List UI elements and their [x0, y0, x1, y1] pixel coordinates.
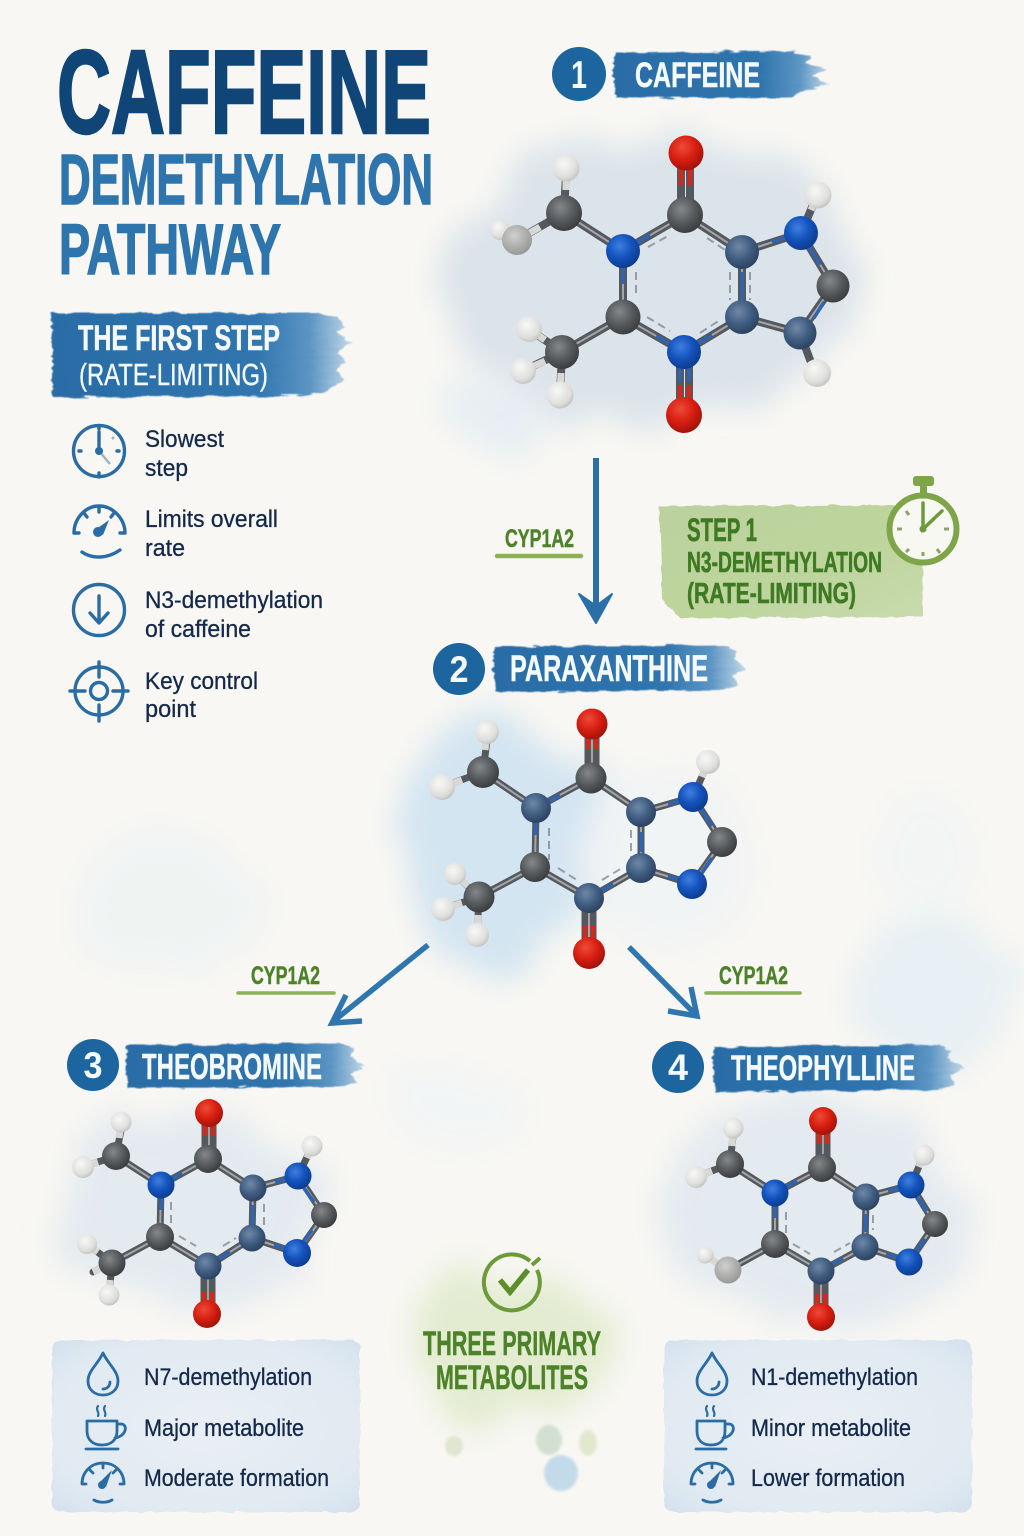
icon: coffee cup [696, 1406, 733, 1449]
step 4 header: theophylline: 4 [668, 1047, 688, 1088]
step 1 header: caffeine [552, 47, 830, 101]
arrow: paraxanthine to theophylline [629, 947, 697, 1016]
banner: the first step heading: THE FIRST STEP [78, 319, 280, 358]
step 4 header: theophylline [652, 1041, 965, 1093]
list item: slowest step: step [145, 455, 188, 482]
step 4 header: theophylline: THEOPHYLLINE [731, 1049, 915, 1088]
list item: key control point: point [145, 696, 196, 723]
panel: theophylline facts [664, 1340, 972, 1512]
step 2 header: paraxanthine: 2 [450, 649, 468, 690]
panel: theobromine facts: N7-demethylation [144, 1364, 312, 1391]
step 2 header: paraxanthine: PARAXANTHINE [510, 648, 708, 689]
molecule: paraxanthine [429, 708, 737, 969]
icon: water drop [697, 1353, 727, 1395]
step 1 header: caffeine: CAFFEINE [635, 56, 760, 95]
callout: step 1 n3-demethylation: N3-DEMETHYLATION [687, 547, 882, 579]
panel: the first step [51, 313, 352, 723]
list item: slowest step: Slowest [145, 426, 224, 453]
arrow: caffeine to paraxanthine [579, 458, 612, 623]
title [57, 26, 433, 290]
list item: n3-demethylation of caffeine [74, 584, 323, 643]
panel: theobromine facts: Moderate formation [144, 1465, 329, 1492]
panel: theophylline facts: Minor metabolite [751, 1415, 911, 1442]
step 1 header: caffeine: 1 [571, 54, 587, 97]
watercolor splashes [445, 1425, 597, 1491]
enzyme label: cyp1a2 to theophylline [706, 962, 800, 993]
list item: key control point: Key control [145, 668, 258, 695]
title: PATHWAY [59, 211, 281, 290]
icon: check circle [484, 1254, 540, 1310]
watercolor background washes [55, 135, 1010, 1420]
enzyme label: cyp1a2 step 1 [497, 525, 581, 556]
emblem: three primary metabolites: THREE PRIMARY [423, 1325, 601, 1363]
molecule: caffeine [490, 136, 850, 433]
icon: stopwatch [890, 476, 956, 562]
panel: theobromine facts: Major metabolite [144, 1415, 304, 1442]
title: CAFFEINE [57, 26, 431, 159]
enzyme label: cyp1a2 to theophylline: CYP1A2 [719, 962, 788, 990]
enzyme label: cyp1a2 step 1: CYP1A2 [505, 525, 574, 553]
callout: step 1 n3-demethylation: STEP 1 [687, 512, 757, 548]
list item: slowest step [74, 426, 224, 482]
list item: n3-demethylation of caffeine: of caffeine [145, 616, 251, 643]
step 3 header: theobromine: THEOBROMINE [142, 1046, 322, 1087]
emblem: three primary metabolites: METABOLITES [436, 1359, 588, 1397]
panel: theophylline facts: Lower formation [751, 1465, 905, 1492]
banner: the first step heading: (RATE-LIMITING) [79, 357, 268, 392]
list item: key control point [70, 662, 258, 723]
list item: limits overall rate: Limits overall [145, 506, 278, 533]
callout: step 1 n3-demethylation [659, 476, 956, 618]
emblem: three primary metabolites [423, 1254, 601, 1491]
icon: down arrow in circle [74, 584, 124, 636]
step 3 header: theobromine [67, 1039, 365, 1091]
list item: n3-demethylation of caffeine: N3-demethylation [145, 587, 323, 614]
arrow: paraxanthine to theobromine [332, 945, 428, 1023]
panel: theobromine facts [52, 1340, 360, 1512]
banner: the first step heading [51, 313, 352, 397]
icon: water drop [88, 1353, 118, 1395]
enzyme label: cyp1a2 to theobromine [238, 962, 334, 993]
icon: gauge [74, 506, 125, 557]
icon: clock [74, 426, 124, 477]
title: DEMETHYLATION [59, 141, 433, 220]
icon: gauge [82, 1463, 124, 1502]
molecule: theobromine [72, 1099, 337, 1328]
list item: limits overall rate: rate [145, 535, 185, 562]
enzyme label: cyp1a2 to theobromine: CYP1A2 [251, 962, 320, 990]
icon: target [70, 662, 128, 721]
panel: theophylline facts: N1-demethylation [751, 1364, 918, 1391]
callout: step 1 n3-demethylation: (RATE-LIMITING) [687, 578, 856, 610]
molecule: theophylline [685, 1107, 948, 1331]
step 3 header: theobromine: 3 [84, 1045, 102, 1086]
icon: coffee cup [86, 1406, 125, 1449]
step 2 header: paraxanthine [433, 643, 746, 695]
icon: gauge [691, 1463, 733, 1502]
list item: limits overall rate [74, 506, 278, 562]
